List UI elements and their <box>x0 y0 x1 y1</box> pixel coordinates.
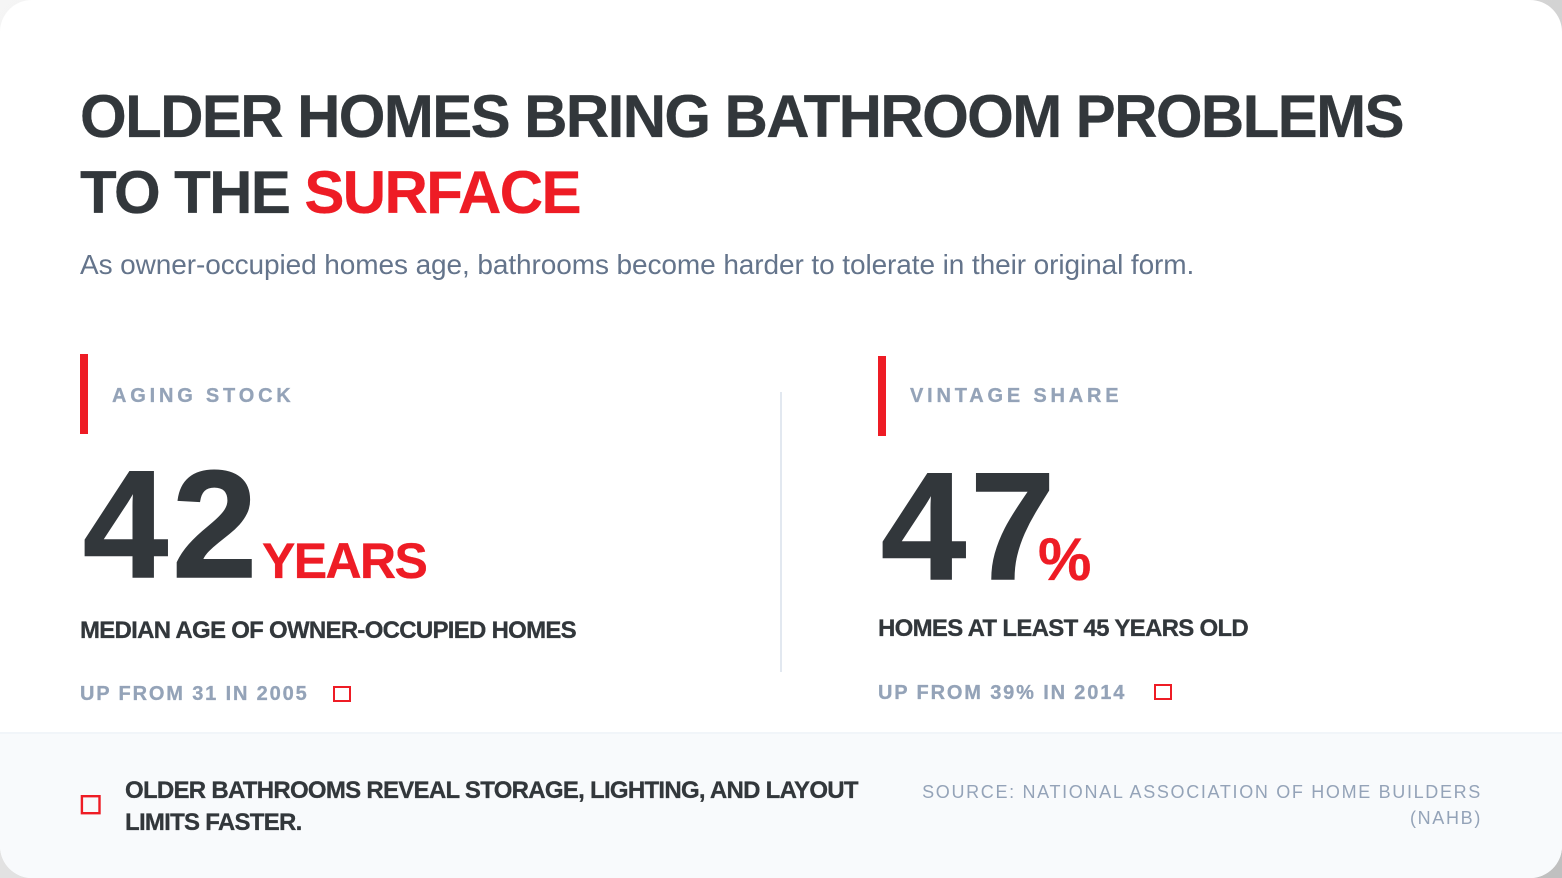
panel: aging stock <box>80 354 576 705</box>
description: MEDIAN AGE OF OWNER-OCCUPIED HOMES <box>80 617 576 644</box>
trend note: UP FROM 31 IN 2005 <box>80 683 309 705</box>
unit: % <box>1038 526 1091 593</box>
title <box>80 83 1403 226</box>
trend note: UP FROM 39% IN 2014 <box>878 682 1126 704</box>
icon: square marker <box>333 686 351 702</box>
unit: YEARS <box>262 533 426 589</box>
source: SOURCE: NATIONAL ASSOCIATION OF HOME BUILDERS <box>922 782 1482 802</box>
takeaway text: OLDER BATHROOMS REVEAL STORAGE, LIGHTING, AND LAYOUT <box>125 777 858 804</box>
accent bar <box>878 356 886 436</box>
icon: square marker <box>1154 684 1172 700</box>
big number: 47 <box>881 441 1059 612</box>
takeaway text <box>125 777 858 836</box>
label: VINTAGE SHARE <box>910 385 1122 407</box>
big number: 42 <box>83 439 261 610</box>
accent bar <box>80 354 88 434</box>
source <box>922 782 1482 828</box>
icon: square marker <box>80 795 101 814</box>
title: TO THE SURFACE <box>80 159 580 226</box>
title: OLDER HOMES BRING BATHROOM PROBLEMS <box>80 83 1403 150</box>
takeaway text: LIMITS FASTER. <box>125 809 302 836</box>
footer band <box>0 732 1562 878</box>
subtitle: As owner-occupied homes age, bathrooms become harder to tolerate in their original form. <box>80 249 1194 280</box>
divider <box>780 392 782 672</box>
panel: vintage share <box>878 356 1248 704</box>
label: AGING STOCK <box>112 385 295 407</box>
source: (NAHB) <box>1410 808 1482 828</box>
description: HOMES AT LEAST 45 YEARS OLD <box>878 615 1248 642</box>
